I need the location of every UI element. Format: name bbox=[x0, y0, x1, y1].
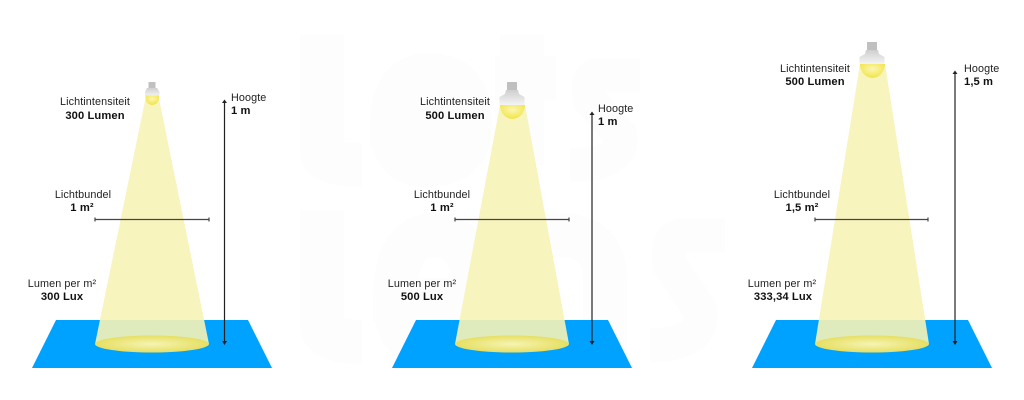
label: lux: Lumen per m² bbox=[748, 278, 816, 290]
floor plane bbox=[752, 320, 992, 368]
panel: 500 lumen at 1 m bbox=[388, 82, 633, 368]
light spot on floor bbox=[455, 336, 569, 352]
light spot on floor bbox=[95, 336, 209, 352]
label: height bbox=[964, 63, 999, 88]
label: beam bbox=[55, 189, 111, 214]
label: beam bbox=[774, 189, 830, 214]
label: light intensity bbox=[60, 96, 130, 122]
label: light intensity: Lichtintensiteit bbox=[780, 63, 850, 75]
label: light intensity bbox=[780, 63, 850, 88]
panel: 500 lumen at 1,5 m bbox=[748, 42, 999, 368]
label: light intensity: 300 Lumen bbox=[65, 110, 125, 122]
label: lux: 300 Lux bbox=[41, 291, 84, 303]
light spot on floor bbox=[815, 336, 929, 352]
label: lux bbox=[388, 278, 456, 303]
label: height: 1 m bbox=[231, 105, 251, 117]
icon: bulb bbox=[500, 82, 525, 119]
label: beam: Lichtbundel bbox=[414, 189, 470, 201]
width line bbox=[455, 218, 569, 222]
label: lux: 500 Lux bbox=[401, 291, 444, 303]
label: height bbox=[598, 103, 633, 128]
panel: 300 lumen at 1 m bbox=[28, 82, 272, 368]
height arrow bbox=[952, 70, 958, 345]
floor plane bbox=[392, 320, 632, 368]
label: height: Hoogte bbox=[231, 92, 266, 104]
floor plane bbox=[32, 320, 272, 368]
icon: bulb bbox=[145, 82, 160, 105]
label: beam: 1 m² bbox=[70, 202, 94, 214]
label: lux: Lumen per m² bbox=[388, 278, 456, 290]
height arrow bbox=[590, 112, 594, 345]
label: beam: 1,5 m² bbox=[786, 202, 819, 214]
light cone bbox=[815, 64, 929, 344]
label: beam bbox=[414, 189, 470, 214]
label: height bbox=[231, 92, 266, 117]
light cone bbox=[455, 105, 569, 344]
label: light intensity: 500 Lumen bbox=[785, 76, 845, 88]
width line bbox=[95, 218, 209, 222]
label: lux bbox=[28, 278, 96, 303]
label: height: Hoogte bbox=[598, 103, 633, 115]
label: height: 1 m bbox=[598, 116, 618, 128]
label: light intensity: 500 Lumen bbox=[425, 110, 485, 122]
label: lux: 333,34 Lux bbox=[754, 291, 813, 303]
width line bbox=[815, 218, 928, 222]
height arrow bbox=[222, 100, 227, 345]
label: height: 1,5 m bbox=[964, 76, 993, 88]
label: light intensity: Lichtintensiteit bbox=[420, 96, 490, 108]
icon: bulb bbox=[860, 42, 885, 78]
label: height: Hoogte bbox=[964, 63, 999, 75]
label: lux bbox=[748, 278, 816, 303]
label: beam: Lichtbundel bbox=[774, 189, 830, 201]
label: light intensity bbox=[420, 96, 490, 122]
label: light intensity: Lichtintensiteit bbox=[60, 96, 130, 108]
label: beam: 1 m² bbox=[430, 202, 454, 214]
label: beam: Lichtbundel bbox=[55, 189, 111, 201]
background watermark letters bbox=[322, 35, 725, 360]
light cone bbox=[95, 96, 209, 344]
label: lux: Lumen per m² bbox=[28, 278, 96, 290]
